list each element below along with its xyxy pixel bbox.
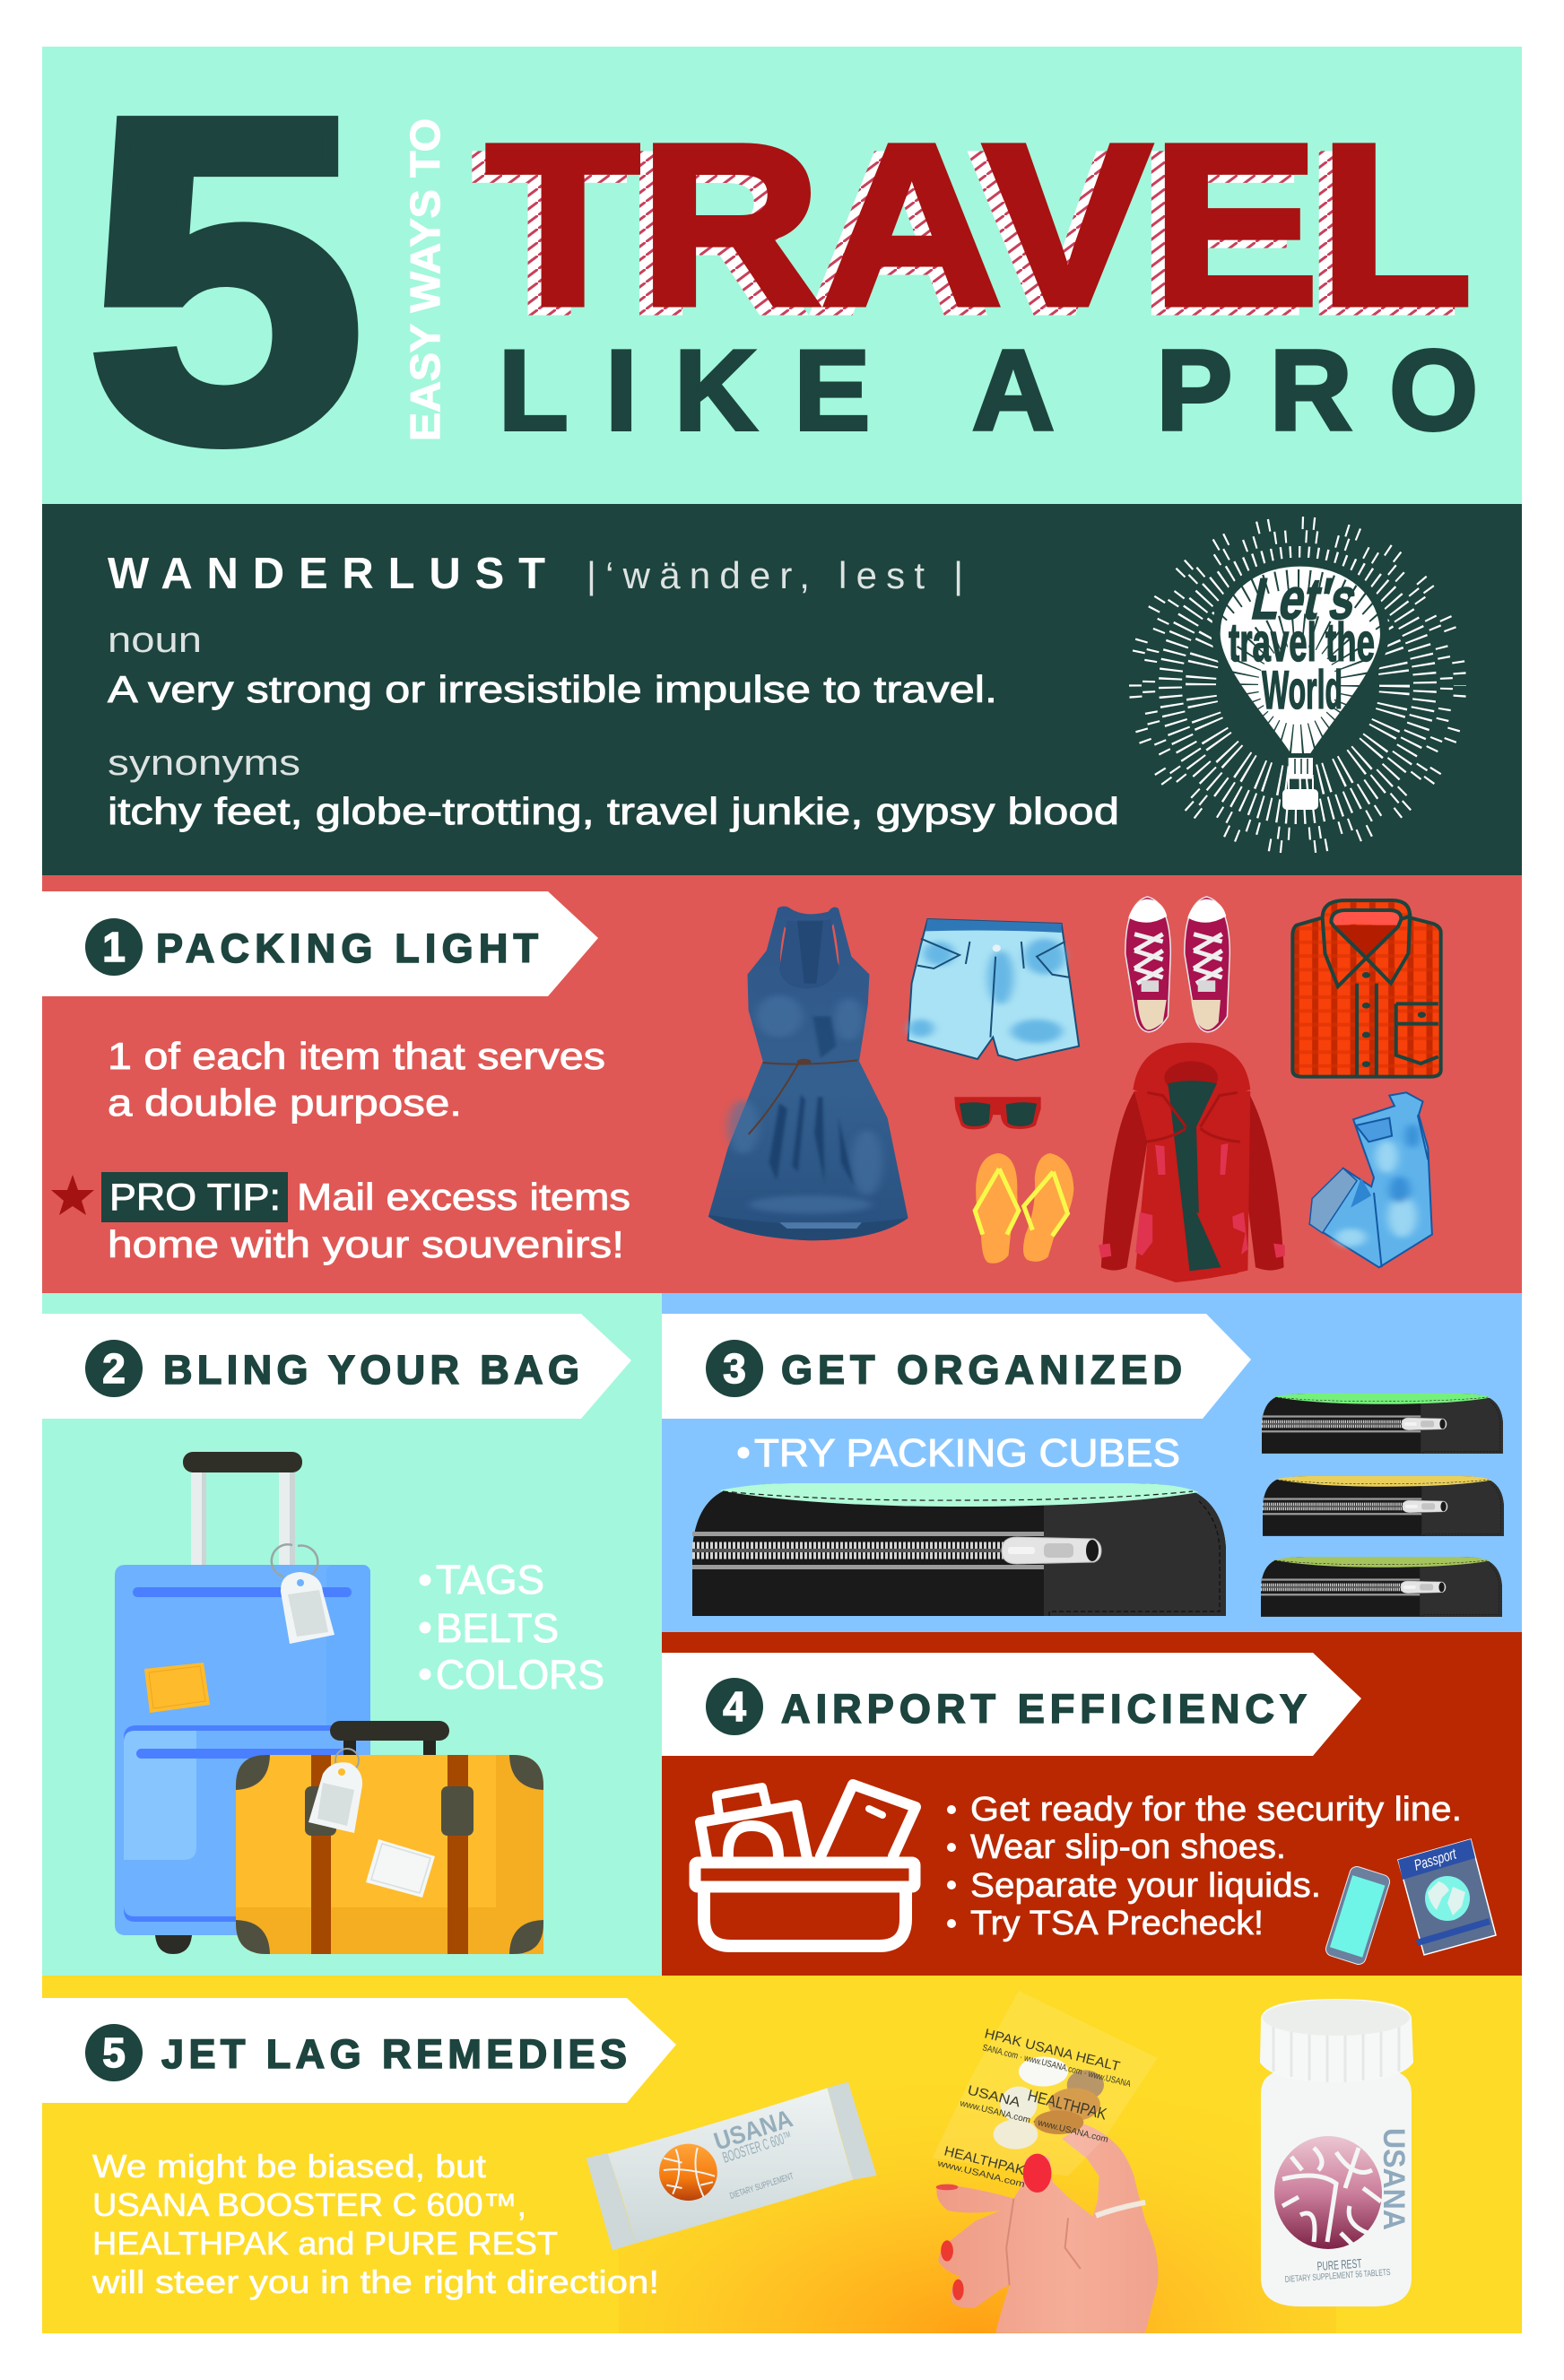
icon: pure rest bottle: DIETARY SUPPLEMENT 56 TABLETS [1284, 2268, 1391, 2285]
title word TRAVEL: TRAVEL [486, 97, 1473, 353]
icon: red coat [1099, 1043, 1285, 1282]
icon: hand holding healthpak: HEALTHPAK [943, 2143, 1026, 2178]
ribbon heading 3 [662, 1314, 1251, 1419]
pro tip: Mail excess items [297, 1176, 630, 1218]
ribbon heading 4 [662, 1653, 1361, 1756]
icon: blue suitcase [115, 1452, 370, 1954]
body text: a double purpose. [108, 1081, 462, 1124]
icon: booster c packet: BOOSTER C 600™ [720, 2128, 794, 2167]
list: tags belts colors: COLORS [436, 1652, 604, 1698]
list: tags belts colors: TAGS [436, 1557, 544, 1603]
panel: title header [42, 24, 1522, 535]
icon: denim shorts [908, 919, 1079, 1060]
pro tip: home with your souvenirs! [108, 1223, 624, 1265]
icon: booster c packet: DIETARY SUPPLEMENT [729, 2172, 795, 2202]
icon: pure rest bottle: USANA [1377, 2128, 1411, 2230]
part of speech: noun [108, 621, 202, 660]
icon: passport [1398, 1839, 1496, 1955]
body text [91, 2148, 659, 2300]
rotated subtitle: EASY WAYS TO [402, 118, 448, 441]
icon: pure rest bottle: PURE REST [1316, 2256, 1362, 2273]
ribbon heading 5: 5 [102, 2029, 126, 2076]
icon: sunglasses [954, 1097, 1041, 1129]
panel: 3 get organized [662, 1293, 1522, 1632]
list: tags belts colors [420, 1557, 604, 1698]
checklist: Try TSA Precheck! [970, 1905, 1264, 1942]
icon: small green cube [1262, 1394, 1503, 1454]
title word TRAVEL hatched shadow: TRAVEL [473, 105, 1459, 361]
panel: wanderlust definition [42, 504, 1522, 875]
icon: hot air balloon with rays: travel the [1229, 612, 1375, 673]
icon: hand holding healthpak: www.USANA.com · www.USANA.com [958, 2098, 1109, 2145]
definition: A very strong or irresistible impulse to travel. [108, 668, 997, 710]
icon: hot air balloon with rays: World [1262, 660, 1342, 720]
ribbon heading 1: 1 [102, 924, 126, 970]
synonyms list: itchy feet, globe-trotting, travel junkie, gypsy blood [108, 790, 1119, 832]
ribbon heading 3: 3 [723, 1345, 746, 1392]
body text: We might be biased, but [92, 2148, 486, 2185]
icon: yellow suitcase [236, 1721, 543, 1954]
ribbon heading 2: BLING YOUR BAG [163, 1347, 579, 1393]
pro tip [101, 1172, 630, 1265]
icon: small yellow cube [1263, 1476, 1504, 1536]
icon: hand holding healthpak: www.USANA.com [935, 2159, 1026, 2190]
icon: small olive cube [1261, 1557, 1502, 1617]
synonyms label: synonyms [108, 743, 300, 783]
icon: hand holding healthpak: HPAK USANA HEALT [983, 2026, 1122, 2074]
list: tags belts colors: BELTS [436, 1605, 559, 1651]
pronunciation: |‘wänder, lest | [586, 554, 963, 596]
checklist: Wear slip-on shoes. [970, 1828, 1286, 1866]
icon: rolled jeans [1309, 1092, 1432, 1267]
icon: plaid shirt [1292, 900, 1441, 1077]
panel: 5 jet lag remedies [42, 1976, 1522, 2333]
icon: blue dress [708, 907, 908, 1240]
icon: flip flops [975, 1153, 1073, 1264]
icon: booster c packet [586, 2082, 877, 2250]
body text: will steer you in the right direction! [91, 2263, 659, 2300]
body text: USANA BOOSTER C 600™, [92, 2186, 526, 2223]
icon: hand holding healthpak [933, 1991, 1158, 2333]
icon: booster c packet: USANA [710, 2104, 795, 2156]
pro tip: PRO TIP: [109, 1176, 281, 1218]
body text [108, 1035, 605, 1124]
icon: phone [1324, 1864, 1392, 1967]
icon: basket with camera and phone [695, 1785, 916, 1946]
checklist: Separate your liquids. [970, 1867, 1321, 1905]
word: WANDERLUST [108, 550, 545, 598]
icon: hand holding healthpak: HEALTHPAK [1026, 2086, 1108, 2124]
ribbon heading 2 [42, 1314, 631, 1419]
body text: 1 of each item that serves [108, 1035, 605, 1077]
icon: hot air balloon with rays: Let's [1247, 566, 1363, 631]
icon: star [51, 1175, 94, 1215]
subtitle LIKE A PRO: LIKE A PRO [499, 326, 1478, 454]
body text: HEALTHPAK and PURE REST [92, 2225, 558, 2262]
ribbon heading 2: 2 [102, 1345, 126, 1392]
checklist [947, 1791, 1462, 1942]
icon: hand holding healthpak: USANA [966, 2082, 1021, 2110]
icon: sneakers [1125, 897, 1229, 1032]
big number 5: 5 [87, 24, 364, 535]
icon: hand holding healthpak: SANA.com · www.USANA.com · www.USANA [981, 2043, 1132, 2089]
ribbon heading 3: GET ORGANIZED [781, 1347, 1182, 1393]
ribbon heading 4: 4 [723, 1683, 746, 1730]
ribbon heading 4: AIRPORT EFFICIENCY [781, 1686, 1307, 1732]
ribbon heading 1: PACKING LIGHT [156, 925, 538, 971]
icon: large packing cube [692, 1483, 1226, 1616]
packing cubes caption: TRY PACKING CUBES [754, 1431, 1180, 1475]
ribbon heading 5: JET LAG REMEDIES [161, 2031, 627, 2077]
ribbon heading 5 [42, 1998, 676, 2103]
ribbon heading 1 [42, 891, 598, 996]
icon: hot air balloon with rays [1135, 523, 1460, 847]
panel: 2 bling your bag [42, 1293, 662, 1976]
icon: pure rest bottle [1260, 1999, 1413, 2306]
checklist: Get ready for the security line. [970, 1791, 1462, 1828]
icon: passport: Passport [1412, 1845, 1459, 1874]
panel: 4 airport efficiency [662, 1632, 1522, 1976]
panel: 1 packing light [42, 875, 1522, 1293]
